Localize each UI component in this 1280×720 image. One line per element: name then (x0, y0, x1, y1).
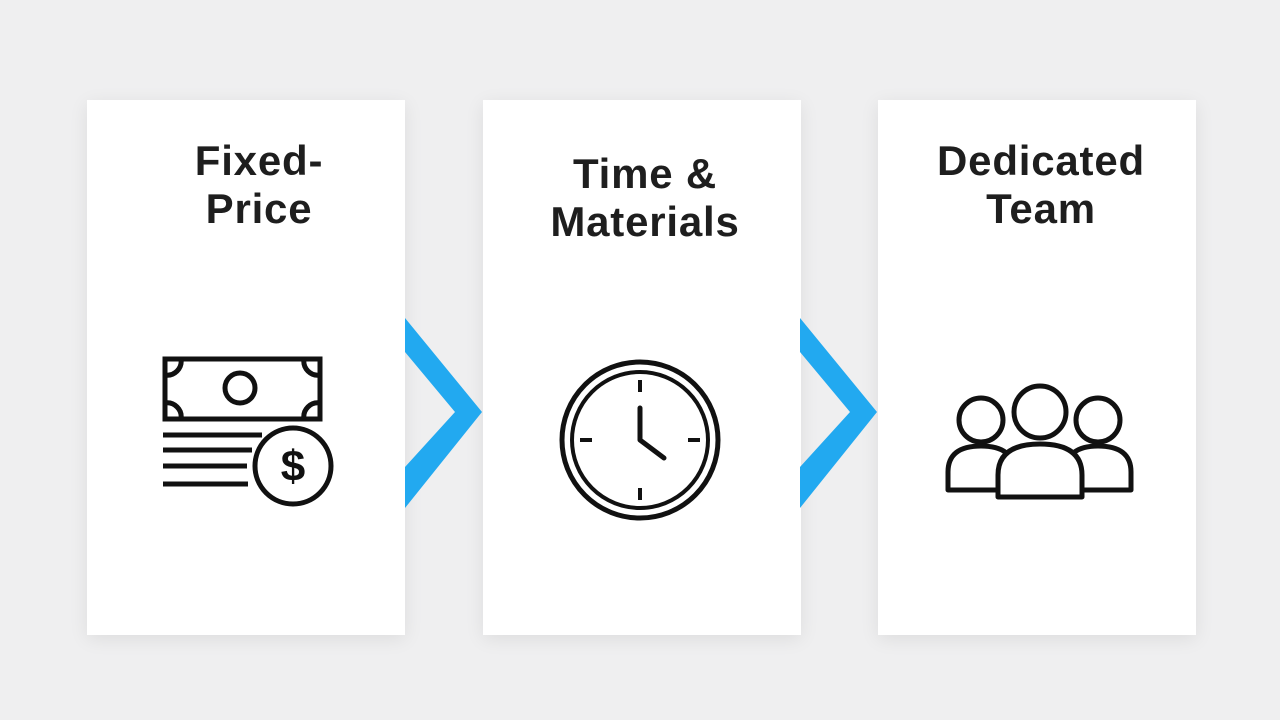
heading: dedicated team: Team (986, 185, 1096, 232)
heading: time & materials (550, 150, 740, 245)
icon: money (163, 359, 331, 504)
heading: dedicated team (937, 137, 1145, 232)
heading: fixed-price (195, 137, 323, 232)
heading: fixed-price: Price (206, 185, 312, 232)
icon: clock (562, 362, 718, 518)
panel: time & materials (483, 100, 801, 635)
heading: time & materials: Materials (550, 198, 740, 245)
heading: dedicated team: Dedicated (937, 137, 1145, 184)
heading: fixed-price: Fixed- (195, 137, 323, 184)
panel: fixed-price (87, 100, 405, 635)
heading: time & materials: Time & (573, 150, 717, 197)
arrow: chevron 2 (800, 318, 877, 508)
icon: team (948, 386, 1131, 497)
icon: money: $ (281, 442, 305, 491)
arrow: chevron 1 (405, 318, 482, 508)
panel: dedicated team (878, 100, 1196, 635)
